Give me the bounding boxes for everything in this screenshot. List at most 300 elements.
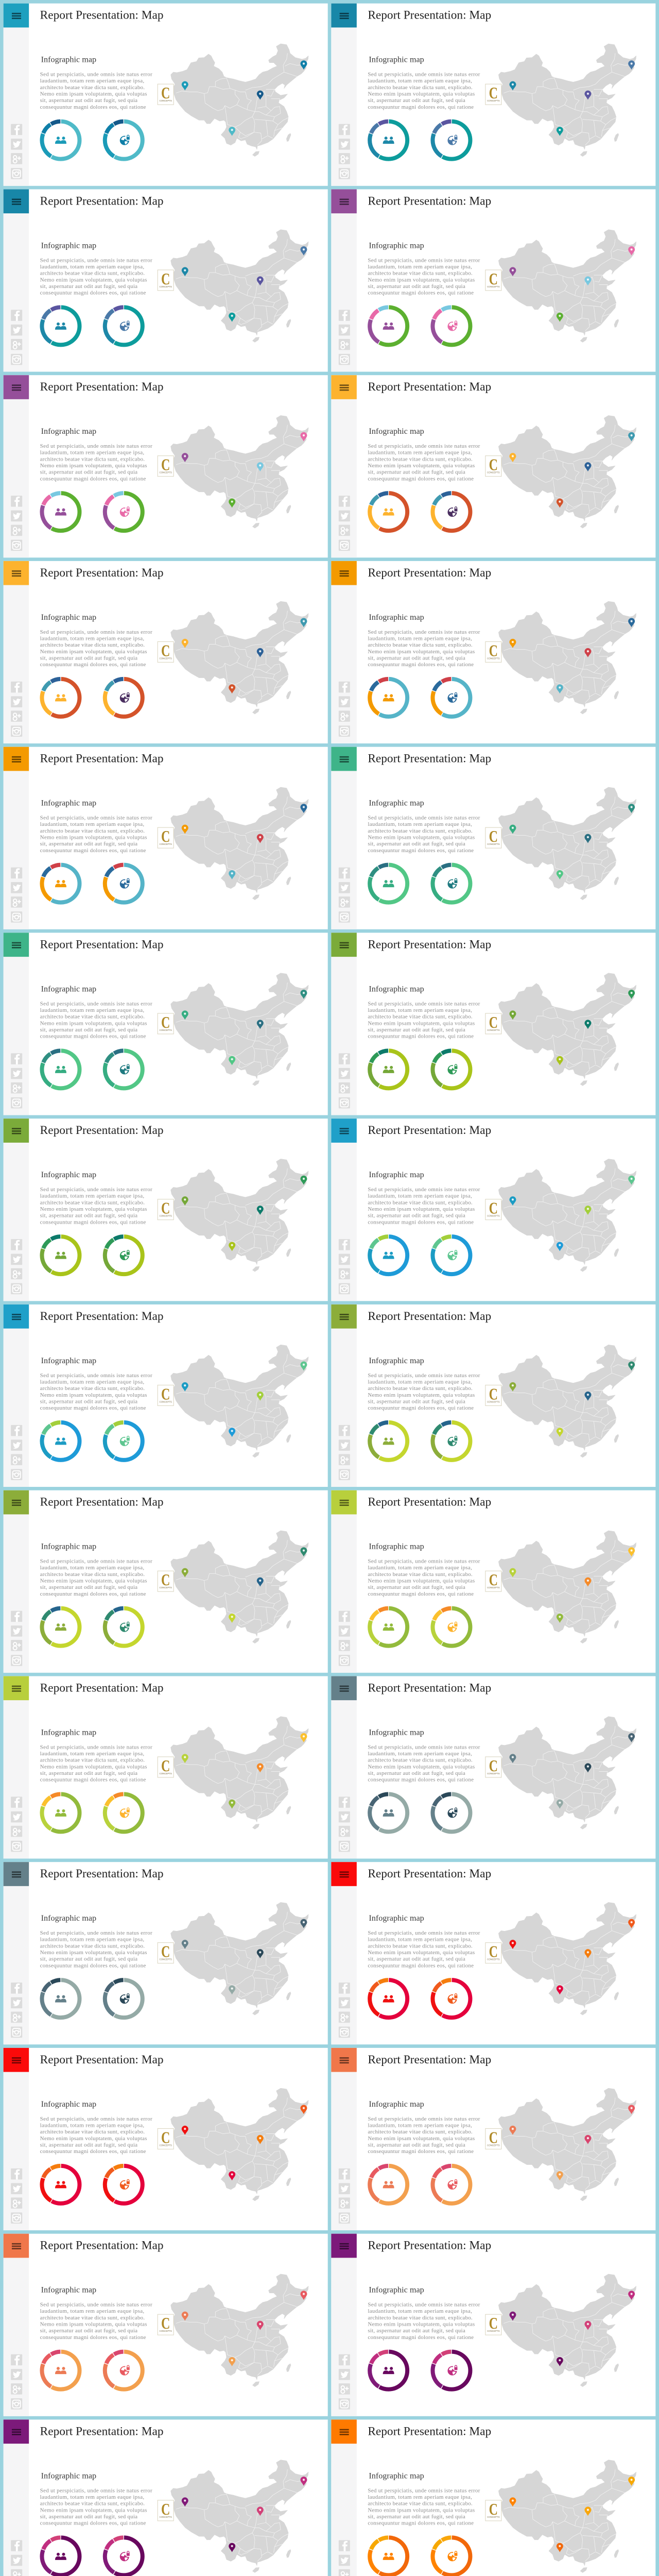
body text bbox=[40, 1001, 152, 1040]
body text: sit, aspernatur aut odit aut fugit, sed quia bbox=[40, 2514, 137, 2520]
body text: consequuntur magni dolores eos, qui ratione bbox=[368, 1405, 474, 1411]
donut chart: people bbox=[370, 1236, 407, 1274]
subheading: Infographic map bbox=[369, 2471, 424, 2480]
subheading: Infographic map bbox=[41, 1170, 96, 1179]
slide panel 21 bbox=[4, 1862, 328, 2044]
donut chart: globe bbox=[105, 1980, 143, 2018]
donut chart: globe bbox=[432, 307, 470, 345]
slide panel 1 bbox=[4, 4, 328, 186]
body text: consequuntur magni dolores eos, qui ratione bbox=[368, 1962, 474, 1969]
body text: laudantium, totam rem aperiam eaque ipsa, bbox=[368, 635, 472, 641]
pin west bbox=[182, 1196, 188, 1206]
title: Report Presentation: Map bbox=[368, 2053, 491, 2066]
pin south bbox=[229, 1614, 235, 1623]
title: Report Presentation: Map bbox=[40, 194, 164, 208]
pin centre bbox=[257, 1763, 264, 1772]
donut chart: globe bbox=[432, 1050, 470, 1088]
donut chart: people bbox=[42, 865, 79, 903]
pin west bbox=[182, 2126, 188, 2135]
pin south bbox=[229, 1800, 235, 1809]
donut chart: globe bbox=[432, 1980, 470, 2018]
pin north-east bbox=[628, 1919, 635, 1928]
body text: consequuntur magni dolores eos, qui ratione bbox=[368, 848, 474, 854]
slide panel 4 bbox=[331, 189, 655, 372]
map of China bbox=[498, 1159, 636, 1272]
header menu block bbox=[4, 1676, 29, 1700]
body text: Nemo enim ipsam voluptatem, quia voluptas bbox=[40, 463, 147, 469]
body text: Sed ut perspiciatis, unde omnis iste natus error bbox=[40, 815, 152, 821]
social icons bbox=[11, 1425, 22, 1480]
slide background bbox=[331, 2234, 655, 2416]
social icons bbox=[11, 496, 22, 551]
pin west bbox=[182, 2312, 188, 2321]
header menu block bbox=[331, 1304, 357, 1329]
body text: architecto beatae vitae dicta sunt, explicabo. bbox=[368, 1014, 473, 1020]
subheading: Infographic map bbox=[41, 1542, 96, 1551]
pin west bbox=[182, 2497, 188, 2506]
body text: consequuntur magni dolores eos, qui ratione bbox=[368, 104, 474, 110]
donut chart: people bbox=[370, 865, 407, 903]
donut chart: globe bbox=[105, 1608, 143, 1646]
title: Report Presentation: Map bbox=[40, 380, 164, 394]
body text: Nemo enim ipsam voluptatem, quia voluptas bbox=[40, 2507, 147, 2513]
body text: consequuntur magni dolores eos, qui ratione bbox=[40, 2148, 146, 2155]
body text: consequuntur magni dolores eos, qui ratione bbox=[368, 476, 474, 482]
pin west bbox=[509, 2126, 516, 2135]
body text: Nemo enim ipsam voluptatem, quia voluptas bbox=[368, 649, 475, 655]
header menu block bbox=[4, 933, 29, 957]
body text bbox=[40, 2487, 152, 2527]
subheading: Infographic map bbox=[41, 984, 96, 993]
pin west bbox=[182, 267, 188, 276]
social icons bbox=[339, 1053, 350, 1108]
donut chart: globe bbox=[432, 122, 470, 159]
slide background bbox=[4, 747, 328, 929]
body text: architecto beatae vitae dicta sunt, explicabo. bbox=[40, 2501, 145, 2507]
body text: Sed ut perspiciatis, unde omnis iste natus error bbox=[368, 1187, 480, 1193]
donut chart: globe bbox=[105, 2166, 143, 2204]
slide panel 20 bbox=[331, 1676, 655, 1859]
slide panel 14 bbox=[331, 1118, 655, 1301]
body text: Sed ut perspiciatis, unde omnis iste natus error bbox=[40, 1187, 152, 1193]
map of China bbox=[498, 601, 636, 714]
donut chart: people bbox=[42, 493, 79, 531]
pin south bbox=[557, 1800, 563, 1809]
logo stamp bbox=[158, 270, 174, 291]
body text bbox=[40, 443, 152, 482]
subheading: Infographic map bbox=[369, 1356, 424, 1365]
subheading: Infographic map bbox=[369, 55, 424, 64]
header menu block bbox=[4, 1862, 29, 1886]
pin west bbox=[182, 825, 188, 834]
pin north-east bbox=[628, 1362, 635, 1371]
pin centre bbox=[584, 91, 591, 100]
pin centre bbox=[584, 1949, 591, 1958]
pin centre bbox=[257, 2506, 264, 2516]
body text: consequuntur magni dolores eos, qui ratione bbox=[368, 290, 474, 296]
body text bbox=[368, 2487, 480, 2527]
body text bbox=[40, 629, 152, 668]
body text: laudantium, totam rem aperiam eaque ipsa, bbox=[368, 1379, 472, 1385]
body text: sit, aspernatur aut odit aut fugit, sed quia bbox=[368, 1770, 465, 1776]
subheading: Infographic map bbox=[41, 799, 96, 808]
body text: laudantium, totam rem aperiam eaque ipsa, bbox=[368, 78, 472, 84]
body text: sit, aspernatur aut odit aut fugit, sed quia bbox=[368, 841, 465, 847]
subheading: Infographic map bbox=[369, 2285, 424, 2295]
donut chart: globe bbox=[105, 1422, 143, 1460]
pin west bbox=[182, 1382, 188, 1392]
subheading: Infographic map bbox=[41, 2099, 96, 2109]
body text: architecto beatae vitae dicta sunt, explicabo. bbox=[368, 828, 473, 834]
body text: Nemo enim ipsam voluptatem, quia voluptas bbox=[368, 1950, 475, 1956]
map of China bbox=[498, 1902, 636, 2015]
body text: Sed ut perspiciatis, unde omnis iste natus error bbox=[368, 629, 480, 635]
body text bbox=[40, 1187, 152, 1225]
header menu block bbox=[331, 561, 357, 585]
pin west bbox=[509, 639, 516, 648]
title: Report Presentation: Map bbox=[368, 9, 491, 22]
donut chart: people bbox=[370, 679, 407, 717]
body text: consequuntur magni dolores eos, qui ratione bbox=[40, 1777, 146, 1783]
slide panel 18 bbox=[331, 1490, 655, 1673]
logo stamp bbox=[158, 2500, 174, 2521]
social icons bbox=[11, 2354, 22, 2410]
body text: architecto beatae vitae dicta sunt, explicabo. bbox=[368, 1571, 473, 1578]
pin west bbox=[509, 825, 516, 834]
logo stamp bbox=[485, 2500, 501, 2521]
slide background bbox=[331, 1862, 655, 2044]
header menu block bbox=[331, 1676, 357, 1700]
body text: consequuntur magni dolores eos, qui ratione bbox=[40, 662, 146, 668]
body text: laudantium, totam rem aperiam eaque ipsa, bbox=[368, 1751, 472, 1757]
pin centre bbox=[584, 2135, 591, 2144]
slide panel 15 bbox=[4, 1304, 328, 1487]
header menu block bbox=[4, 375, 29, 399]
header menu block bbox=[4, 561, 29, 585]
donut chart: people bbox=[42, 2537, 79, 2575]
body text: sit, aspernatur aut odit aut fugit, sed quia bbox=[40, 1584, 137, 1590]
body text: laudantium, totam rem aperiam eaque ipsa, bbox=[40, 1565, 144, 1571]
body text: laudantium, totam rem aperiam eaque ipsa, bbox=[368, 1007, 472, 1013]
body text: architecto beatae vitae dicta sunt, explicabo. bbox=[368, 2501, 473, 2507]
donut chart: globe bbox=[105, 493, 143, 531]
slide panel 9 bbox=[4, 747, 328, 929]
donut chart: globe bbox=[105, 679, 143, 717]
logo stamp bbox=[158, 1385, 174, 1405]
body text: sit, aspernatur aut odit aut fugit, sed quia bbox=[40, 1770, 137, 1776]
body text: Sed ut perspiciatis, unde omnis iste natus error bbox=[40, 72, 152, 78]
body text bbox=[368, 1372, 480, 1411]
map of China bbox=[498, 44, 636, 157]
body text: laudantium, totam rem aperiam eaque ipsa, bbox=[40, 635, 144, 641]
social icons bbox=[339, 1239, 350, 1294]
body text: laudantium, totam rem aperiam eaque ipsa, bbox=[40, 1007, 144, 1013]
map of China bbox=[498, 415, 636, 528]
pin centre bbox=[584, 276, 591, 285]
slide panel 7 bbox=[4, 561, 328, 743]
body text: Sed ut perspiciatis, unde omnis iste natus error bbox=[40, 2116, 152, 2122]
pin north-east bbox=[628, 246, 635, 256]
logo stamp bbox=[158, 456, 174, 477]
logo stamp bbox=[485, 1013, 501, 1034]
pin west bbox=[509, 267, 516, 276]
pin north-east bbox=[628, 60, 635, 70]
pin north-east bbox=[628, 432, 635, 442]
pin centre bbox=[584, 1392, 591, 1401]
pin north-east bbox=[300, 1733, 307, 1742]
slide background bbox=[4, 2048, 328, 2230]
body text: Sed ut perspiciatis, unde omnis iste natus error bbox=[368, 72, 480, 78]
pin north-east bbox=[300, 432, 307, 442]
slide background bbox=[4, 375, 328, 557]
slide background bbox=[331, 1490, 655, 1673]
map of China bbox=[171, 601, 308, 714]
social icons bbox=[11, 2540, 22, 2576]
body text: architecto beatae vitae dicta sunt, explicabo. bbox=[368, 1943, 473, 1949]
slide background bbox=[4, 1304, 328, 1487]
slide panel 2 bbox=[331, 4, 655, 186]
title: Report Presentation: Map bbox=[40, 1124, 164, 1137]
pin west bbox=[182, 453, 188, 462]
logo stamp bbox=[485, 1943, 501, 1963]
subheading: Infographic map bbox=[369, 1727, 424, 1737]
slide panel 12 bbox=[331, 933, 655, 1115]
body text: architecto beatae vitae dicta sunt, explicabo. bbox=[368, 2315, 473, 2321]
body text: consequuntur magni dolores eos, qui ratione bbox=[40, 476, 146, 482]
title: Report Presentation: Map bbox=[40, 752, 164, 766]
slide background bbox=[331, 1304, 655, 1487]
subheading: Infographic map bbox=[369, 241, 424, 250]
body text: Nemo enim ipsam voluptatem, quia voluptas bbox=[40, 2321, 147, 2328]
pin north-east bbox=[300, 2291, 307, 2300]
body text bbox=[368, 1558, 480, 1597]
body text: architecto beatae vitae dicta sunt, explicabo. bbox=[368, 270, 473, 277]
pin west bbox=[509, 81, 516, 91]
title: Report Presentation: Map bbox=[40, 2053, 164, 2066]
pin north-east bbox=[300, 804, 307, 813]
pin west bbox=[182, 81, 188, 91]
body text: laudantium, totam rem aperiam eaque ipsa, bbox=[368, 1937, 472, 1943]
pin south bbox=[229, 870, 235, 879]
body text: Sed ut perspiciatis, unde omnis iste natus error bbox=[40, 629, 152, 635]
body text: consequuntur magni dolores eos, qui ratione bbox=[40, 1219, 146, 1225]
map of China bbox=[498, 1345, 636, 1458]
body text: laudantium, totam rem aperiam eaque ipsa, bbox=[368, 264, 472, 270]
donut chart: people bbox=[370, 122, 407, 159]
map of China bbox=[171, 2088, 308, 2201]
title: Report Presentation: Map bbox=[40, 1310, 164, 1323]
body text: consequuntur magni dolores eos, qui ratione bbox=[368, 2334, 474, 2341]
body text: laudantium, totam rem aperiam eaque ipsa, bbox=[40, 2122, 144, 2128]
map of China bbox=[171, 2274, 308, 2387]
header menu block bbox=[4, 1490, 29, 1514]
body text: Nemo enim ipsam voluptatem, quia voluptas bbox=[368, 277, 475, 283]
body text bbox=[368, 72, 480, 110]
body text: Nemo enim ipsam voluptatem, quia voluptas bbox=[40, 1206, 147, 1212]
body text: Sed ut perspiciatis, unde omnis iste natus error bbox=[40, 1930, 152, 1936]
map of China bbox=[171, 1717, 308, 1829]
body text bbox=[40, 815, 152, 854]
pin south bbox=[557, 684, 563, 693]
body text: Nemo enim ipsam voluptatem, quia voluptas bbox=[40, 91, 147, 97]
body text: architecto beatae vitae dicta sunt, explicabo. bbox=[40, 84, 145, 91]
title: Report Presentation: Map bbox=[368, 1124, 491, 1137]
body text: architecto beatae vitae dicta sunt, explicabo. bbox=[40, 1943, 145, 1949]
pin south bbox=[557, 127, 563, 136]
body text: Sed ut perspiciatis, unde omnis iste natus error bbox=[40, 2487, 152, 2494]
slide background bbox=[331, 561, 655, 743]
body text: architecto beatae vitae dicta sunt, explicabo. bbox=[40, 2129, 145, 2135]
donut chart: people bbox=[42, 679, 79, 717]
header menu block bbox=[331, 747, 357, 771]
header menu block bbox=[4, 1304, 29, 1329]
logo stamp bbox=[158, 2314, 174, 2335]
title: Report Presentation: Map bbox=[40, 1681, 164, 1694]
body text: Nemo enim ipsam voluptatem, quia voluptas bbox=[368, 1020, 475, 1026]
body text: architecto beatae vitae dicta sunt, explicabo. bbox=[40, 642, 145, 648]
pin west bbox=[182, 1940, 188, 1949]
pin north-east bbox=[300, 1362, 307, 1371]
donut chart: people bbox=[42, 1422, 79, 1460]
title: Report Presentation: Map bbox=[368, 1496, 491, 1509]
title: Report Presentation: Map bbox=[368, 380, 491, 394]
logo stamp bbox=[485, 2314, 501, 2335]
slide panel 25 bbox=[4, 2234, 328, 2416]
body text: sit, aspernatur aut odit aut fugit, sed quia bbox=[40, 841, 137, 847]
header menu block bbox=[331, 4, 357, 27]
slide background bbox=[4, 933, 328, 1115]
body text bbox=[40, 72, 152, 110]
slide panel 8 bbox=[331, 561, 655, 743]
subheading: Infographic map bbox=[41, 241, 96, 250]
body text: laudantium, totam rem aperiam eaque ipsa, bbox=[40, 264, 144, 270]
pin north-east bbox=[300, 246, 307, 256]
body text: Nemo enim ipsam voluptatem, quia voluptas bbox=[40, 649, 147, 655]
social icons bbox=[339, 1611, 350, 1666]
body text: laudantium, totam rem aperiam eaque ipsa, bbox=[368, 1565, 472, 1571]
header menu block bbox=[331, 1118, 357, 1143]
body text: Nemo enim ipsam voluptatem, quia voluptas bbox=[368, 1206, 475, 1212]
donut chart: globe bbox=[105, 865, 143, 903]
pin south bbox=[229, 1428, 235, 1437]
pin west bbox=[509, 1196, 516, 1206]
social icons bbox=[11, 1611, 22, 1666]
body text: consequuntur magni dolores eos, qui ratione bbox=[368, 1033, 474, 1040]
slide background bbox=[4, 561, 328, 743]
body text: Sed ut perspiciatis, unde omnis iste natus error bbox=[368, 257, 480, 263]
donut chart: people bbox=[42, 307, 79, 345]
donut chart: globe bbox=[432, 2352, 470, 2389]
pin centre bbox=[257, 2321, 264, 2330]
donut chart: people bbox=[42, 1608, 79, 1646]
pin south bbox=[229, 1242, 235, 1251]
donut chart: people bbox=[370, 307, 407, 345]
slide panel 16 bbox=[331, 1304, 655, 1487]
body text: sit, aspernatur aut odit aut fugit, sed quia bbox=[40, 1398, 137, 1404]
pin centre bbox=[584, 648, 591, 657]
body text: sit, aspernatur aut odit aut fugit, sed quia bbox=[368, 1956, 465, 1962]
body text: laudantium, totam rem aperiam eaque ipsa, bbox=[40, 450, 144, 456]
body text: laudantium, totam rem aperiam eaque ipsa, bbox=[40, 2308, 144, 2314]
donut chart: globe bbox=[432, 2537, 470, 2575]
pin centre bbox=[584, 462, 591, 471]
body text: sit, aspernatur aut odit aut fugit, sed quia bbox=[368, 97, 465, 104]
body text: consequuntur magni dolores eos, qui ratione bbox=[368, 1591, 474, 1597]
donut chart: people bbox=[370, 1608, 407, 1646]
slide background bbox=[4, 2234, 328, 2416]
body text: Sed ut perspiciatis, unde omnis iste natus error bbox=[368, 2487, 480, 2494]
donut chart: globe bbox=[432, 679, 470, 717]
subheading: Infographic map bbox=[369, 613, 424, 622]
map of China bbox=[171, 1159, 308, 1272]
pin centre bbox=[257, 276, 264, 285]
donut chart: globe bbox=[432, 1422, 470, 1460]
body text: laudantium, totam rem aperiam eaque ipsa, bbox=[368, 2122, 472, 2128]
social icons bbox=[11, 310, 22, 365]
logo stamp bbox=[485, 641, 501, 662]
pin south bbox=[557, 313, 563, 322]
slide panel 3 bbox=[4, 189, 328, 372]
body text: laudantium, totam rem aperiam eaque ipsa, bbox=[40, 821, 144, 827]
pin north-east bbox=[628, 990, 635, 999]
body text: Nemo enim ipsam voluptatem, quia voluptas bbox=[368, 463, 475, 469]
pin centre bbox=[584, 2321, 591, 2330]
body text: Sed ut perspiciatis, unde omnis iste natus error bbox=[368, 2116, 480, 2122]
body text: architecto beatae vitae dicta sunt, explicabo. bbox=[368, 84, 473, 91]
social icons bbox=[339, 496, 350, 551]
body text bbox=[368, 815, 480, 854]
body text: architecto beatae vitae dicta sunt, explicabo. bbox=[40, 1199, 145, 1206]
body text bbox=[40, 2302, 152, 2341]
pin west bbox=[509, 1754, 516, 1763]
body text: Sed ut perspiciatis, unde omnis iste natus error bbox=[40, 1001, 152, 1007]
pin south bbox=[557, 1056, 563, 1065]
pin south bbox=[229, 2357, 235, 2366]
map of China bbox=[171, 1345, 308, 1458]
donut chart: people bbox=[370, 1794, 407, 1832]
slide panel 24 bbox=[331, 2048, 655, 2230]
body text bbox=[40, 1930, 152, 1969]
logo stamp bbox=[485, 1385, 501, 1405]
social icons bbox=[339, 124, 350, 179]
donut chart: people bbox=[42, 2352, 79, 2389]
logo stamp bbox=[158, 1943, 174, 1963]
donut chart: people bbox=[42, 1236, 79, 1274]
body text: Sed ut perspiciatis, unde omnis iste natus error bbox=[40, 1372, 152, 1379]
header menu block bbox=[331, 933, 357, 957]
body text: sit, aspernatur aut odit aut fugit, sed quia bbox=[368, 1584, 465, 1590]
body text: laudantium, totam rem aperiam eaque ipsa, bbox=[40, 78, 144, 84]
title: Report Presentation: Map bbox=[40, 566, 164, 580]
social icons bbox=[339, 2168, 350, 2224]
map of China bbox=[171, 1902, 308, 2015]
pin north-east bbox=[300, 618, 307, 628]
header menu block bbox=[331, 1490, 357, 1514]
body text: Sed ut perspiciatis, unde omnis iste natus error bbox=[40, 1744, 152, 1750]
social icons bbox=[339, 1797, 350, 1852]
body text: architecto beatae vitae dicta sunt, explicabo. bbox=[40, 1757, 145, 1764]
logo stamp bbox=[485, 2128, 501, 2149]
body text: architecto beatae vitae dicta sunt, explicabo. bbox=[368, 642, 473, 648]
body text: Sed ut perspiciatis, unde omnis iste natus error bbox=[368, 815, 480, 821]
pin south bbox=[557, 2543, 563, 2552]
logo stamp bbox=[158, 641, 174, 662]
logo stamp bbox=[158, 1571, 174, 1591]
pin south bbox=[557, 870, 563, 879]
body text: Sed ut perspiciatis, unde omnis iste natus error bbox=[368, 1372, 480, 1379]
donut chart: globe bbox=[432, 865, 470, 903]
body text: architecto beatae vitae dicta sunt, explicabo. bbox=[368, 456, 473, 462]
